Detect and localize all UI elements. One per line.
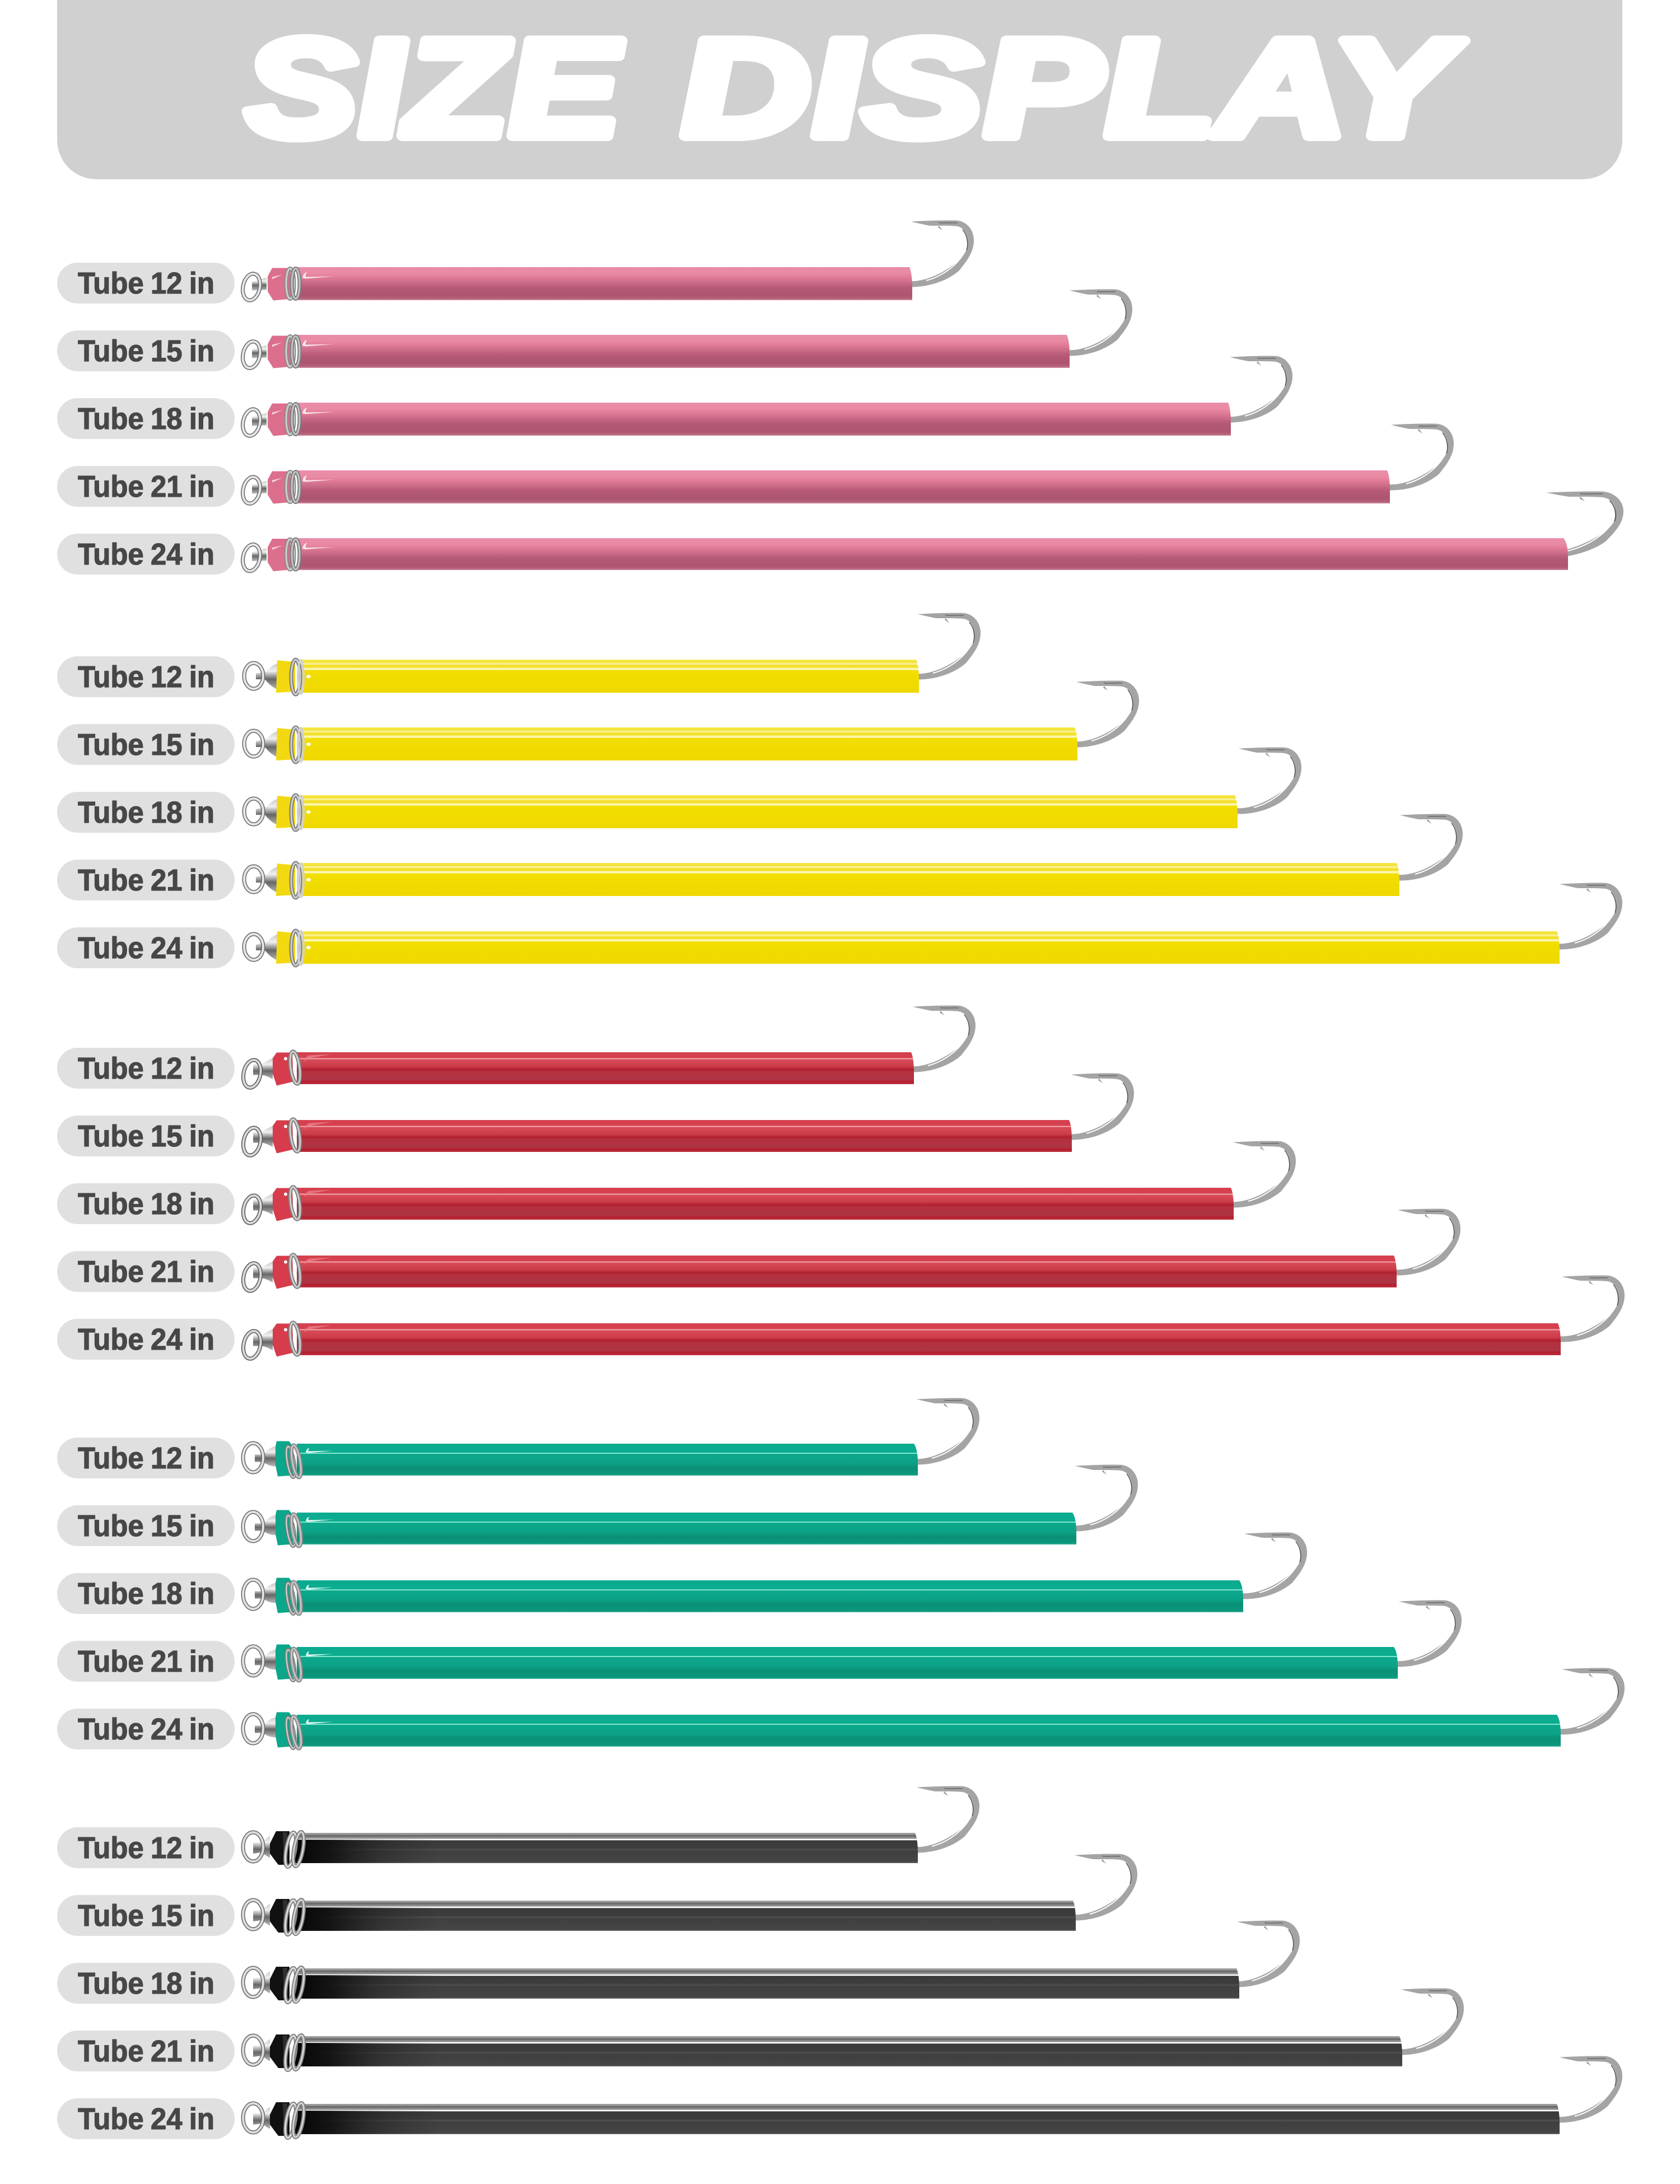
swivel head (244, 795, 311, 830)
label pill (57, 1505, 235, 1546)
hook (1242, 1532, 1307, 1599)
swivel head (243, 1899, 441, 1935)
tube (297, 1513, 1076, 1544)
label pill (57, 860, 235, 900)
row: yellow tube 24 in (57, 883, 1622, 968)
label pill: Tube 12 in (78, 267, 214, 300)
row: yellow tube 15 in (57, 680, 1139, 765)
row: black tube 12 in (57, 1786, 979, 1868)
row: red tube 12 in (57, 1005, 976, 1089)
label pill: Tube 18 in (78, 1967, 214, 2000)
tube (295, 1833, 918, 1863)
label pill (57, 1183, 235, 1224)
label pill (57, 1319, 235, 1360)
label pill (57, 656, 235, 697)
hook (1231, 1141, 1296, 1207)
hook (1228, 356, 1292, 422)
row: pink tube 18 in (57, 356, 1292, 439)
swivel head (241, 1254, 332, 1292)
label pill: Tube 24 in (78, 2102, 214, 2136)
label pill (57, 330, 235, 371)
label pill: Tube 18 in (78, 1187, 214, 1221)
swivel head (240, 336, 334, 370)
tube (297, 1188, 1234, 1220)
label pill: Tube 18 in (78, 796, 214, 829)
swivel head (244, 931, 311, 965)
hook (911, 1005, 976, 1072)
row: yellow tube 21 in (57, 814, 1463, 900)
label pill (57, 1116, 235, 1156)
label pill: Tube 24 in (78, 931, 214, 965)
swivel head (243, 1510, 333, 1547)
hook (1560, 1668, 1625, 1735)
row: pink tube 21 in (57, 423, 1454, 507)
hook (1557, 883, 1622, 950)
swivel head (241, 1187, 332, 1225)
label pill: Tube 12 in (78, 660, 214, 694)
tube (297, 1052, 914, 1084)
swivel head (243, 1712, 333, 1749)
label pill (57, 2098, 235, 2139)
hook (1396, 1208, 1460, 1276)
label pill (57, 1963, 235, 2004)
hook (916, 613, 981, 680)
hook (909, 220, 974, 287)
swivel head (243, 1967, 441, 2003)
row: green tube 12 in (57, 1398, 979, 1478)
swivel head (241, 1322, 332, 1360)
label pill (57, 724, 235, 765)
tube (295, 1901, 1076, 1931)
title: SIZE DISPLAY: DISPLAY (675, 10, 1471, 166)
tube (298, 267, 912, 300)
hook (1236, 747, 1301, 814)
tube (301, 795, 1238, 828)
swivel head (244, 660, 311, 694)
label pill (57, 398, 235, 439)
hook (1398, 814, 1463, 880)
row: black tube 24 in (57, 2056, 1622, 2139)
hook (1557, 2056, 1622, 2122)
label pill: Tube 15 in (78, 1119, 214, 1153)
tube (295, 2104, 1560, 2134)
tube (295, 1968, 1239, 1999)
row: green tube 15 in (57, 1464, 1138, 1547)
row: yellow tube 18 in (57, 747, 1301, 833)
label pill: Tube 24 in (78, 1323, 214, 1356)
row: green tube 21 in (57, 1600, 1462, 1682)
tube (297, 1256, 1397, 1287)
swivel head (243, 1831, 441, 1868)
hook (1072, 1854, 1137, 1921)
hook (1067, 289, 1132, 356)
label pill: Tube 24 in (78, 1712, 214, 1746)
row: pink tube 24 in (57, 491, 1623, 575)
panel: pink tubes (57, 220, 1623, 575)
row: red tube 24 in (57, 1275, 1625, 1360)
title: SIZE DISPLAY (240, 10, 1471, 166)
tube (298, 335, 1070, 368)
label pill: Tube 21 in (78, 864, 214, 897)
label pill (57, 534, 235, 575)
tube (298, 538, 1568, 570)
swivel head (244, 727, 311, 762)
hook (1073, 1464, 1138, 1531)
label pill (57, 1709, 235, 1749)
panel: black tubes (57, 1786, 1622, 2139)
row: black tube 18 in (57, 1920, 1300, 2004)
hook (1389, 423, 1454, 491)
tube (297, 1580, 1243, 1612)
panel: red tubes (57, 1005, 1625, 1360)
hook (1399, 1988, 1464, 2055)
row: red tube 15 in (57, 1073, 1134, 1157)
swivel head (240, 268, 334, 302)
swivel head (243, 1441, 333, 1478)
row: green tube 24 in (57, 1668, 1625, 1749)
swivel head (241, 1051, 332, 1089)
row: green tube 18 in (57, 1532, 1307, 1614)
tube (301, 727, 1077, 760)
label pill (57, 1048, 235, 1089)
row: black tube 15 in (57, 1854, 1137, 1936)
swivel head (243, 2034, 441, 2071)
hook (1069, 1073, 1134, 1140)
label pill (57, 1573, 235, 1614)
swivel head (243, 1578, 333, 1614)
hook (914, 1398, 979, 1465)
swivel head (240, 472, 334, 505)
row: pink tube 15 in (57, 289, 1132, 371)
swivel head (244, 863, 311, 898)
label pill (57, 466, 235, 507)
row: red tube 18 in (57, 1141, 1296, 1225)
hook (1235, 1920, 1300, 1987)
label pill: Tube 21 in (78, 470, 214, 503)
tube (297, 1323, 1561, 1355)
tube (297, 1715, 1561, 1747)
label pill: Tube 21 in (78, 2034, 214, 2068)
hook (1543, 491, 1623, 558)
swivel head (243, 2102, 441, 2139)
label pill: Tube 15 in (78, 1899, 214, 1933)
row: red tube 21 in (57, 1208, 1460, 1292)
label pill: Tube 15 in (78, 728, 214, 762)
label pill (57, 792, 235, 833)
label pill (57, 263, 235, 304)
label pill: Tube 15 in (78, 334, 214, 368)
panel: green tubes (57, 1398, 1625, 1749)
row: black tube 21 in (57, 1988, 1464, 2071)
label pill (57, 1251, 235, 1292)
hook (914, 1786, 979, 1852)
label pill: Tube 12 in (78, 1441, 214, 1475)
swivel head (241, 1119, 332, 1157)
label pill: Tube 12 in (78, 1052, 214, 1085)
tube (297, 1120, 1072, 1152)
label pill: Tube 15 in (78, 1509, 214, 1543)
label pill (57, 1827, 235, 1868)
tube (295, 2036, 1402, 2066)
swivel head (240, 539, 334, 573)
swivel head (240, 403, 334, 437)
panel: yellow tubes (57, 613, 1622, 968)
tube (301, 660, 919, 693)
tube (298, 403, 1231, 436)
tube (301, 863, 1399, 896)
label pill (57, 1641, 235, 1682)
label pill: Tube 24 in (78, 538, 214, 571)
label pill: Tube 12 in (78, 1831, 214, 1865)
title banner (57, 0, 1622, 179)
label pill (57, 2031, 235, 2071)
label pill: Tube 18 in (78, 402, 214, 436)
row: yellow tube 12 in (57, 613, 981, 697)
hook (1397, 1600, 1462, 1667)
hook (1074, 680, 1139, 747)
tube (298, 470, 1390, 503)
label pill (57, 1895, 235, 1936)
tube (297, 1647, 1398, 1679)
label pill: Tube 21 in (78, 1645, 214, 1678)
label pill (57, 1438, 235, 1478)
swivel head (243, 1644, 333, 1681)
title: SIZE DISPLAY: SIZE (240, 10, 628, 166)
label pill: Tube 18 in (78, 1577, 214, 1611)
hook (1560, 1275, 1625, 1342)
tube (301, 931, 1560, 964)
tube (297, 1444, 918, 1476)
label pill (57, 927, 235, 968)
row: pink tube 12 in (57, 220, 974, 304)
label pill: Tube 21 in (78, 1255, 214, 1289)
